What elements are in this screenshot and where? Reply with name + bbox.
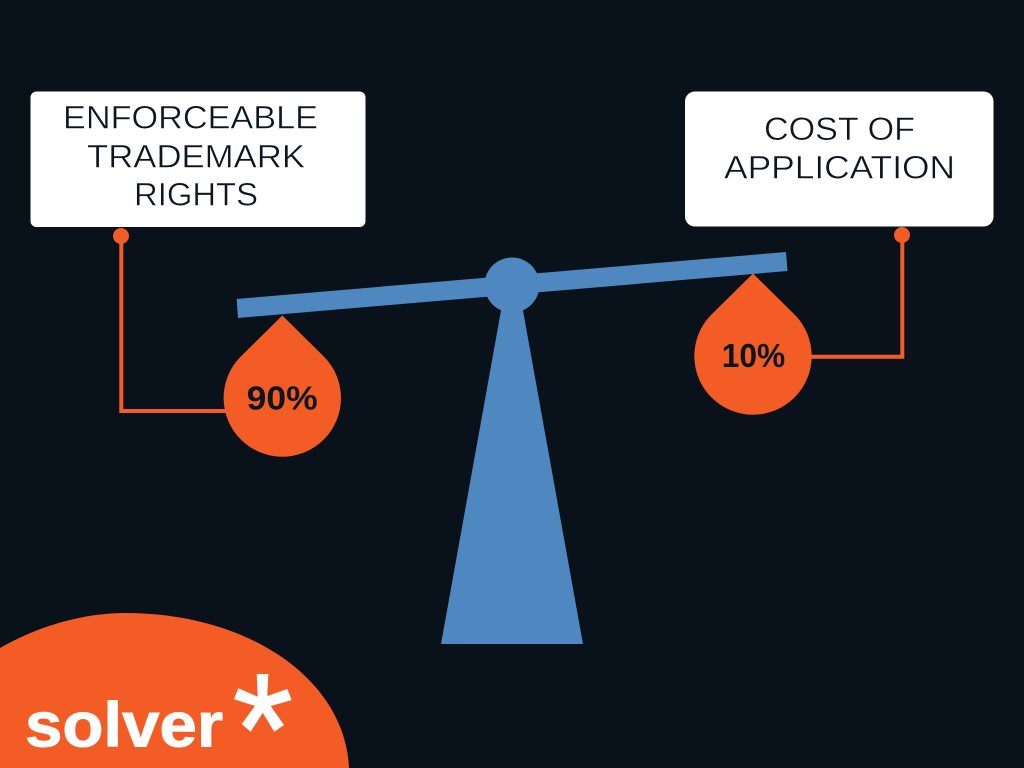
label text right: COST OF [764,111,915,147]
balance scale [237,252,787,644]
label text left: TRADEMARK [87,138,305,174]
connector: left label to 90% drop [113,228,230,411]
weight: 10% drop: 10% [722,338,785,375]
label text left [63,99,318,213]
weight: 90% drop [224,316,341,457]
label text left: ENFORCEABLE [63,99,318,135]
label box right [685,92,994,226]
logo: solver [0,613,349,768]
scale beam [237,252,787,318]
label box left [30,92,366,227]
icon: logo asterisk [234,674,292,732]
label text right [724,111,955,185]
weight: 10% drop [694,274,812,415]
label text left: RIGHTS [134,177,258,213]
panel: cost of application callout [685,92,994,226]
scale pivot [484,258,540,312]
weight: 90% drop: 90% [247,381,318,418]
panel: enforceable trademark rights callout [30,92,366,227]
logo wordmark: solver [25,690,223,760]
label text right: APPLICATION [724,149,955,185]
connector: right label to 10% drop [805,227,910,357]
logo background shape [0,613,349,768]
scale base [441,305,583,644]
